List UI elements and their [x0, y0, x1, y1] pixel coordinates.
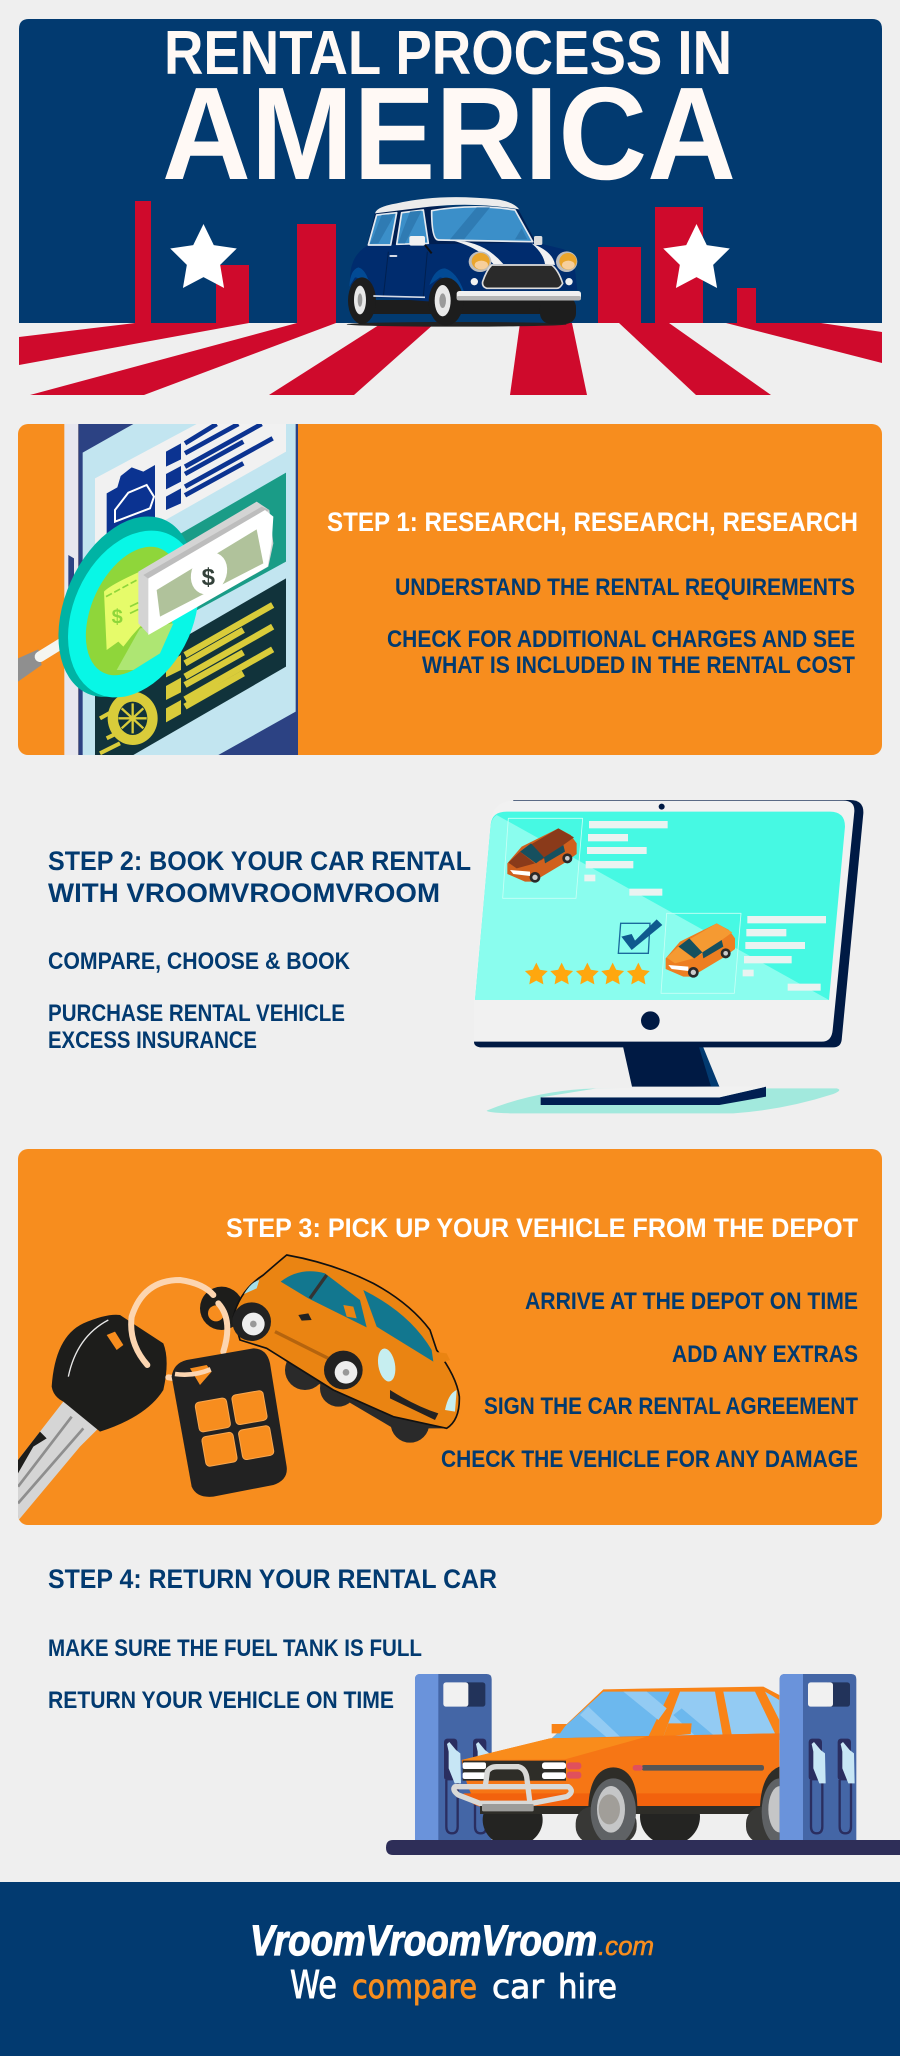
- left fuel pump: [415, 1674, 492, 1840]
- text block: step 2 points: COMPARE, CHOOSE & BOOK: [48, 948, 350, 975]
- illustration: magnifying glass over rental documents: $: [202, 564, 215, 591]
- ground strip: [386, 1840, 900, 1855]
- text block: step 2 points: PURCHASE RENTAL VEHICLE: [48, 1000, 345, 1027]
- panel: step 1: [18, 424, 882, 755]
- skyline bars: [135, 201, 756, 323]
- illustration: magnifying glass over rental documents: [18, 424, 299, 755]
- title line 1: RENTAL PROCESS IN: [164, 19, 732, 88]
- icon: left star: [170, 224, 237, 288]
- text block: step 1 points: [387, 574, 855, 679]
- logo wordmark: VroomVroomVroom: [250, 1917, 597, 1965]
- orange car: [232, 1255, 459, 1443]
- tagline: hire: [558, 1967, 617, 2006]
- icon: right star: [663, 224, 730, 288]
- right fuel pump: [780, 1674, 856, 1840]
- title line 2: AMERICA: [162, 60, 736, 207]
- heading: step 2: STEP 2: BOOK YOUR CAR RENTAL: [48, 846, 471, 876]
- heading: step 4: STEP 4: RETURN YOUR RENTAL CAR: [48, 1564, 497, 1594]
- listing: brown SUV: [503, 818, 583, 898]
- text block: step 3 points: ADD ANY EXTRAS: [672, 1341, 858, 1368]
- text block: step 4 points: MAKE SURE THE FUEL TANK IS FULL: [48, 1635, 422, 1662]
- listing text bars 1: [584, 821, 668, 896]
- heading: step 2: WITH VROOMVROOMVROOM: [48, 878, 440, 908]
- listing text bars 2: [743, 916, 826, 991]
- panel: header banner: [19, 19, 882, 395]
- icon: checkmark box: [618, 919, 662, 953]
- heading: step 3: STEP 3: PICK UP YOUR VEHICLE FROM THE DEPOT: [226, 1213, 858, 1243]
- key ring: [131, 1280, 227, 1379]
- tagline: [290, 1963, 617, 2007]
- remote fob: [172, 1348, 287, 1497]
- heading: step 2: [48, 846, 471, 908]
- text block: step 3 points: ARRIVE AT THE DEPOT ON TIME: [525, 1288, 858, 1315]
- text block: step 3 points: [441, 1288, 858, 1473]
- illustration: magnifying glass over rental documents: $: [112, 606, 123, 628]
- key blade: [18, 1402, 98, 1520]
- orange car body: [451, 1686, 780, 1840]
- text block: step 2 points: EXCESS INSURANCE: [48, 1027, 257, 1054]
- tagline: car: [492, 1967, 544, 2006]
- tagline: compare: [352, 1967, 477, 2006]
- text block: step 2 points: [48, 948, 350, 1054]
- icon: five star rating: [525, 963, 650, 984]
- listing: orange SUV: [661, 913, 741, 993]
- text block: step 4 points: RETURN YOUR VEHICLE ON TIME: [48, 1687, 394, 1714]
- panel: step 3: [18, 1149, 882, 1525]
- logo wordmark: .com: [598, 1931, 654, 1961]
- tagline: We: [290, 1963, 337, 2007]
- illustration: orange car between fuel pumps: [386, 1674, 900, 1855]
- illustration: computer monitor with car listings: [474, 800, 863, 1113]
- key head: [52, 1315, 167, 1432]
- text block: step 4 points: [48, 1635, 422, 1714]
- footer band: [0, 1882, 900, 2056]
- illustration: car keys with orange car fob: [18, 1255, 459, 1520]
- heading: step 1: STEP 1: RESEARCH, RESEARCH, RESEARCH: [327, 507, 858, 537]
- road stripes: [19, 323, 882, 395]
- illustration: blue mini car: [347, 197, 581, 327]
